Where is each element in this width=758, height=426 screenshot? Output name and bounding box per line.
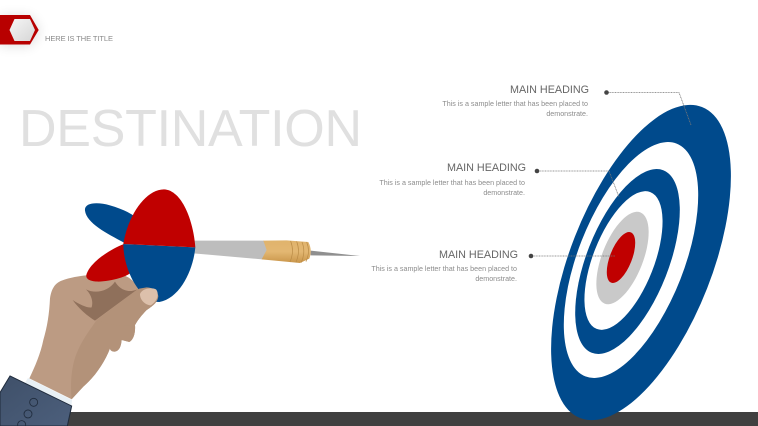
callout 2: middle ring bbox=[379, 162, 619, 197]
palm shading bbox=[71, 287, 158, 399]
jacket sleeve bbox=[0, 376, 72, 426]
callout 1: top ring bbox=[442, 84, 691, 125]
thumb nail bbox=[140, 288, 158, 305]
heading 3: MAIN HEADING bbox=[439, 249, 518, 261]
sleeve cuff bbox=[25, 378, 72, 407]
body text 1: demonstrate. bbox=[546, 110, 588, 118]
floor bar bbox=[0, 412, 758, 426]
back flight blue bbox=[85, 203, 137, 243]
dart needle bbox=[311, 251, 360, 256]
leader line 2 bbox=[537, 171, 619, 197]
logo: white hexagon bbox=[10, 19, 35, 41]
callout 3: bullseye bbox=[371, 249, 615, 283]
page title: HERE IS THE TITLE bbox=[45, 34, 113, 43]
body text 1: This is a sample letter that has been placed to bbox=[442, 100, 588, 108]
dart barrel bbox=[262, 240, 311, 263]
hand skin bbox=[29, 273, 158, 399]
body text 3: demonstrate. bbox=[475, 275, 517, 283]
back flight red bbox=[86, 244, 133, 282]
sleeve buttons bbox=[18, 398, 38, 426]
thumb bbox=[97, 287, 158, 326]
header: logo and page title bbox=[0, 15, 113, 46]
target board bbox=[514, 81, 758, 426]
leader line 3 bbox=[531, 255, 615, 257]
heading 1: MAIN HEADING bbox=[510, 84, 589, 96]
front flight blue bbox=[123, 244, 195, 302]
marker dot 2 bbox=[535, 169, 539, 173]
inner palm shadow bbox=[73, 282, 137, 321]
front flight red bbox=[123, 189, 195, 247]
large title: DESTINATION: DESTINATION bbox=[19, 100, 362, 158]
hand and dart illustration bbox=[0, 189, 360, 426]
body text 2: demonstrate. bbox=[483, 189, 525, 197]
logo: red hexagon tab bbox=[0, 15, 39, 44]
dart shaft bbox=[193, 241, 267, 259]
body text 3: This is a sample letter that has been placed to bbox=[371, 265, 517, 273]
marker dot 1 bbox=[604, 90, 609, 95]
heading 2: MAIN HEADING bbox=[447, 162, 526, 174]
body text 2: This is a sample letter that has been placed to bbox=[379, 179, 525, 187]
leader line 1 bbox=[607, 92, 691, 125]
marker dot 3 bbox=[529, 254, 533, 258]
